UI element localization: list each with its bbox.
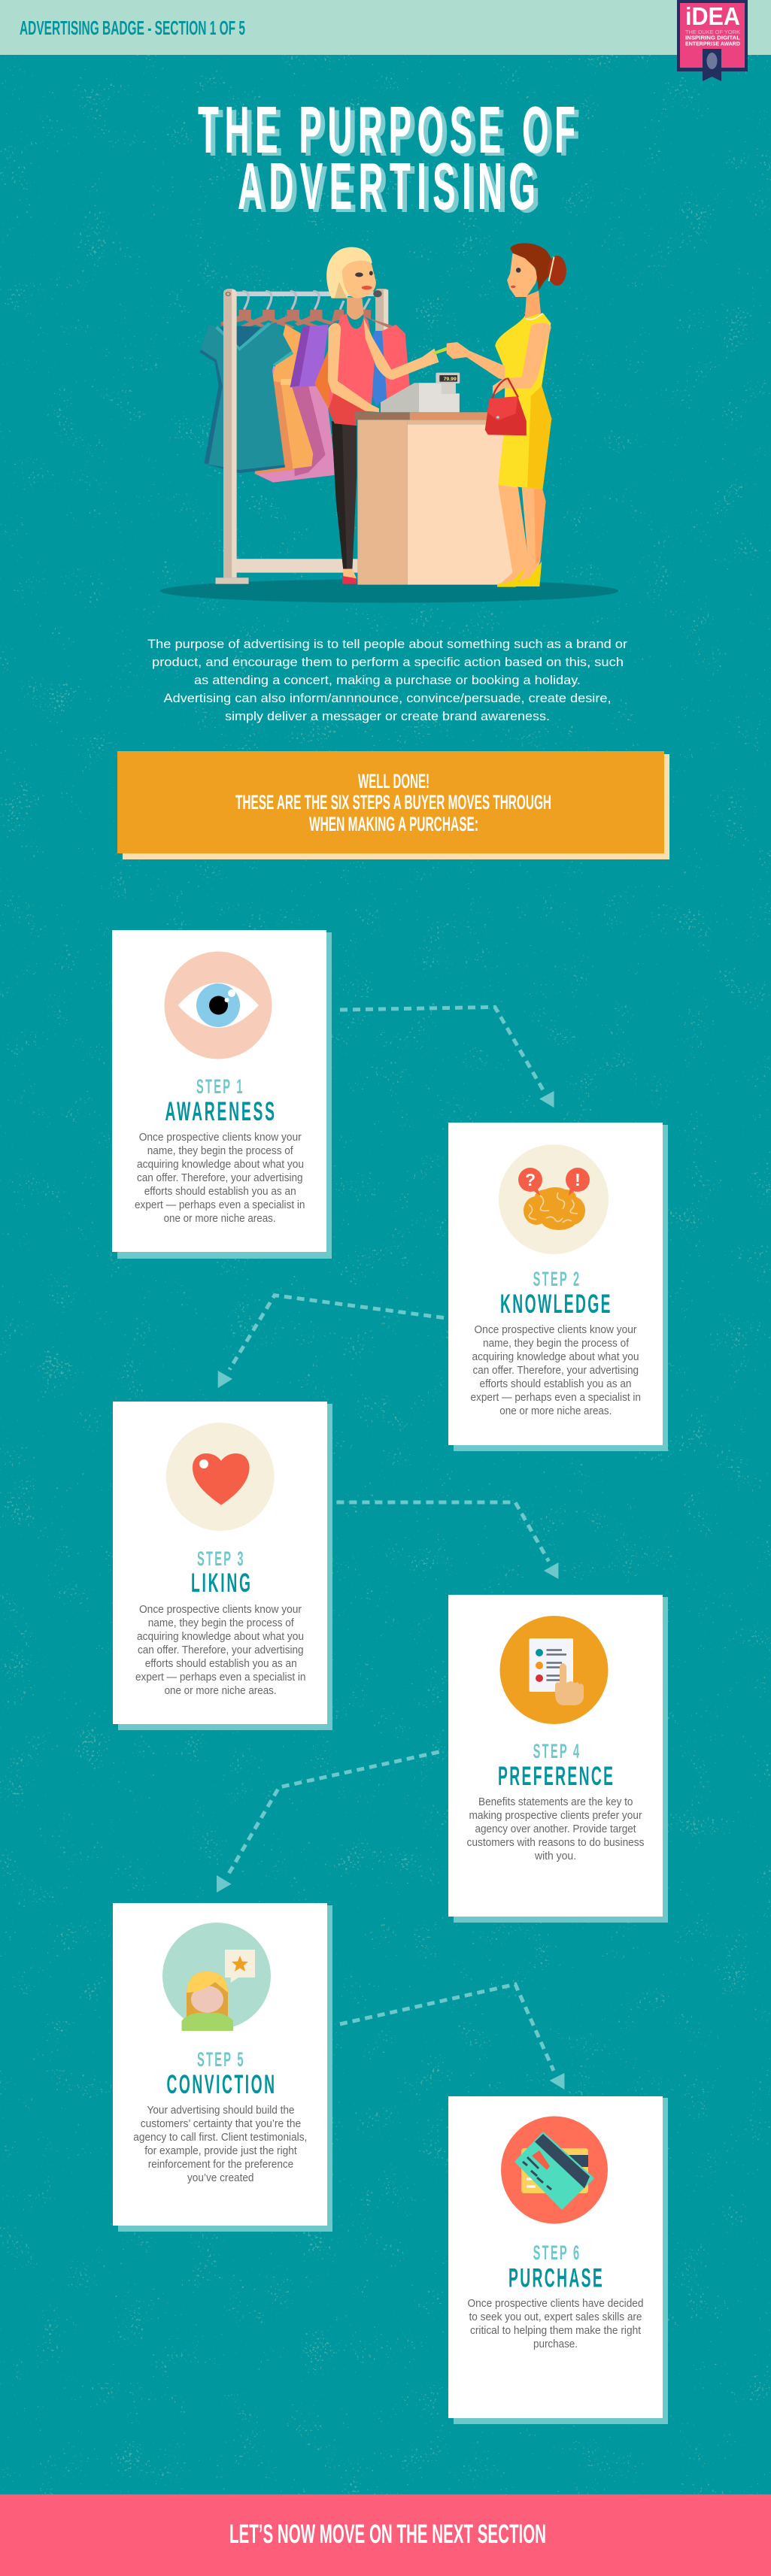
intro paragraph: The purpose of advertising is to tell people about something such as a brand or	[147, 637, 627, 651]
step 4 description: customers with reasons to do business	[466, 1837, 644, 1849]
step 3 description	[135, 1604, 305, 1697]
badge: iDEA award: ENTERPRISE AWARD	[685, 42, 740, 47]
cash register	[381, 373, 460, 412]
icon: brain with question and exclamation: ?	[525, 1170, 536, 1190]
hangers	[242, 291, 370, 310]
panel: step 6 purchase: STEP 6	[533, 2241, 579, 2264]
arrow: step 5 to step 6	[340, 1984, 564, 2090]
arrow: step 1 to step 2	[340, 1007, 554, 1108]
icon: heart	[166, 1423, 275, 1531]
panel: step 6 purchase: PURCHASE	[508, 2262, 603, 2293]
step 1 description	[135, 1132, 305, 1225]
step 4 description: with you.	[534, 1850, 576, 1862]
step 3 description: name, they begin the process of	[148, 1617, 295, 1629]
step 2 description	[471, 1324, 641, 1417]
arrow: step 2 to step 3	[218, 1296, 444, 1388]
counter	[354, 412, 518, 585]
icon: person with review bubble	[162, 1923, 271, 2031]
title: ADVERTISING	[242, 153, 540, 226]
intro paragraph: Advertising can also inform/annnounce, convince/persuade, create desire,	[164, 691, 611, 705]
shop assistant head	[347, 297, 364, 320]
step 5 description: agency to call first. Client testimonials,	[133, 2132, 307, 2144]
step 4 description: making prospective clients prefer your	[469, 1810, 642, 1822]
panel: step 2 knowledge: STEP 2	[533, 1268, 579, 1290]
panel: step 1 awareness: STEP 1	[196, 1075, 243, 1098]
footer banner	[0, 2495, 771, 2576]
panel: step 3 liking	[113, 1402, 332, 1730]
header bar	[0, 0, 771, 55]
arrow: step 3 to step 4	[336, 1502, 558, 1579]
step 3 description: Once prospective clients know your	[139, 1604, 302, 1616]
icon: brain with question and exclamation	[499, 1144, 609, 1254]
panel: step 3 liking: LIKING	[191, 1568, 250, 1597]
icon: eye	[164, 952, 272, 1059]
step 1 description: one or more niche areas.	[164, 1213, 276, 1225]
step 5 description	[133, 2105, 307, 2184]
step 5 description: reinforcement for the preference	[148, 2159, 293, 2171]
panel: step 1 awareness: AWARENESS	[165, 1096, 275, 1126]
step 5 description: customers’ certainty that you’re the	[141, 2118, 301, 2130]
title: THE PURPOSE OF	[202, 96, 580, 170]
panel: step 5 conviction: STEP 5	[197, 2048, 244, 2071]
callout: well done	[117, 751, 669, 859]
cash register: 79.99	[444, 377, 457, 382]
step 5 description: you’ve created	[187, 2172, 254, 2184]
step 3 description: acquiring knowledge about what you	[137, 1631, 304, 1643]
step 2 description: one or more niche areas.	[499, 1405, 612, 1417]
step 4 description: Benefits statements are the key to	[478, 1796, 633, 1808]
step 5 description: for example, provide just the right	[144, 2145, 297, 2157]
panel: step 4 preference	[448, 1595, 668, 1923]
panel: step 3 liking: STEP 3	[197, 1547, 244, 1570]
title	[198, 93, 580, 226]
panel: step 2 knowledge	[448, 1123, 668, 1451]
panel: step 5 conviction	[113, 1903, 332, 2232]
intro paragraph: as attending a concert, making a purchase or booking a holiday.	[194, 673, 581, 687]
step 3 description: one or more niche areas.	[165, 1685, 277, 1697]
badge: iDEA award: THE DUKE OF YORK	[685, 30, 740, 35]
step 2 description: name, they begin the process of	[483, 1338, 630, 1350]
footer banner: LET’S NOW MOVE ON THE NEXT SECTION	[229, 2520, 546, 2549]
step 1 description: can offer. Therefore, your advertising	[137, 1172, 302, 1184]
header section label: ADVERTISING BADGE - SECTION 1 OF 5	[20, 17, 245, 39]
clothes rack	[215, 289, 388, 584]
step 2 description: acquiring knowledge about what you	[472, 1351, 639, 1363]
step 4 description	[466, 1796, 644, 1862]
step 1 description: expert — perhaps even a specialist in	[135, 1199, 305, 1211]
credit card	[433, 344, 454, 355]
step 1 description: acquiring knowledge about what you	[137, 1159, 304, 1171]
badge: iDEA award: iDEA	[685, 2, 740, 30]
arrow: step 4 to step 5	[217, 1752, 439, 1893]
step 6 description	[468, 2298, 644, 2350]
step 6 description: critical to helping them make the right	[470, 2325, 641, 2337]
intro paragraph: simply deliver a messager or create brand awareness.	[225, 709, 550, 723]
step 3 description: can offer. Therefore, your advertising	[138, 1644, 304, 1656]
panel: step 4 preference: PREFERENCE	[498, 1761, 613, 1790]
orange and pink dresses	[255, 366, 336, 483]
intro paragraph	[147, 637, 627, 723]
callout: well done: THESE ARE THE SIX STEPS A BUYER MOVES THROUGH	[235, 791, 551, 814]
step 3 description: expert — perhaps even a specialist in	[135, 1671, 305, 1683]
customer	[447, 243, 566, 587]
panel: step 6 purchase	[448, 2096, 668, 2424]
callout: well done: WHEN MAKING A PURCHASE:	[309, 813, 478, 835]
red handbag	[485, 378, 527, 435]
step 6 description: Once prospective clients have decided	[468, 2298, 644, 2310]
icon: checklist and pointing hand	[499, 1616, 608, 1724]
title: ADVERTISING	[238, 150, 536, 223]
panel: step 2 knowledge: KNOWLEDGE	[500, 1289, 611, 1318]
rack left post	[223, 289, 237, 577]
step 1 description: name, they begin the process of	[147, 1145, 294, 1157]
intro paragraph: product, and encourage them to perform a specific action based on this, such	[152, 655, 624, 669]
icon: brain with question and exclamation: !	[575, 1170, 581, 1190]
step 6 description: to seek you out, expert sales skills are	[469, 2311, 642, 2323]
step 2 description: expert — perhaps even a specialist in	[471, 1392, 641, 1404]
step 6 description: purchase.	[533, 2338, 578, 2350]
shop assistant top and arms	[329, 314, 379, 426]
teal dress	[199, 322, 293, 473]
callout: well done: WELL DONE!	[358, 770, 430, 792]
badge: iDEA award	[677, 0, 748, 81]
icon: credit cards	[501, 2116, 608, 2224]
panel: step 4 preference: STEP 4	[533, 1740, 579, 1762]
title: THE PURPOSE OF	[198, 93, 575, 167]
step 5 description: Your advertising should build the	[147, 2105, 295, 2117]
blue and coral garments	[382, 325, 410, 401]
panel: step 1 awareness	[112, 930, 332, 1259]
illustration: shop assistant and customer at the till	[160, 243, 618, 603]
step 4 description: agency over another. Provide target	[475, 1823, 636, 1835]
step 1 description: efforts should establish you as an	[144, 1186, 296, 1198]
step 2 description: can offer. Therefore, your advertising	[472, 1365, 639, 1377]
step 1 description: Once prospective clients know your	[139, 1132, 302, 1144]
step 2 description: efforts should establish you as an	[480, 1378, 632, 1390]
panel: step 5 conviction: CONVICTION	[166, 2069, 275, 2099]
leggings	[332, 421, 357, 569]
step 2 description: Once prospective clients know your	[474, 1324, 637, 1336]
step 3 description: efforts should establish you as an	[145, 1658, 297, 1670]
badge: iDEA award: INSPIRING DIGITAL	[685, 36, 741, 41]
